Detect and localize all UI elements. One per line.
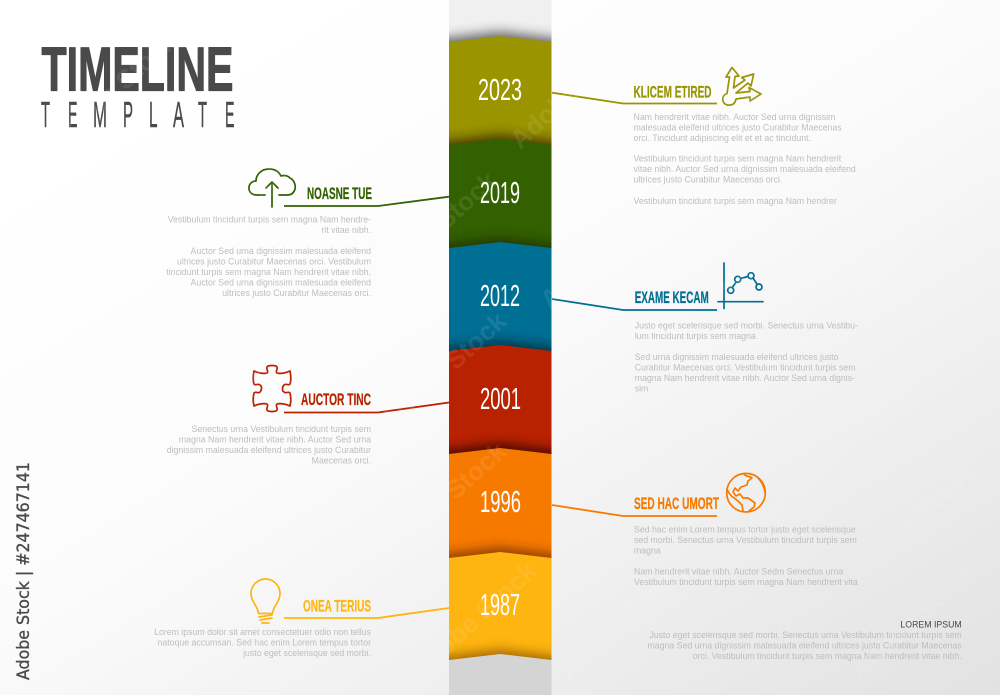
year: 2012: 2012 <box>480 278 520 313</box>
footer text: orci. Vestibulum tincidunt turpis sem magna Nam hendrerit vitae nibh. <box>693 651 962 661</box>
body text <box>634 112 856 206</box>
year: 2023: 2023 <box>478 72 522 107</box>
body text <box>635 321 858 394</box>
body text: tincidunt turpis sem magna Nam hendrerit vitae nibh. <box>166 267 371 277</box>
icon: cloud upload <box>249 169 295 207</box>
band: 1996 orange <box>449 448 552 563</box>
text: Adobe Stock <box>374 435 513 564</box>
title <box>41 36 234 135</box>
text: Adobe Stock <box>704 305 843 434</box>
heading: NOASNE TUE <box>307 184 372 203</box>
body text: Sed hac enim Lorem tempus tortor justo eget scelerisque <box>634 525 856 535</box>
body text <box>154 627 372 658</box>
connector <box>552 299 717 310</box>
text: Adobe Stock <box>834 25 973 154</box>
text: Adobe Stock <box>404 555 543 684</box>
body text: orci. Tincidunt adipiscing elit et et ac tincidunt. <box>634 133 811 143</box>
year: 2019: 2019 <box>480 175 520 210</box>
body text: dignissim malesuada eleifend ultrices justo Curabitur <box>167 445 371 455</box>
heading: ONEA TERIUS <box>303 597 371 616</box>
timeline strip <box>449 0 552 695</box>
body text: ultrices justo Curabitur Maecenas orci. Vestibulum <box>177 256 371 266</box>
subtitle: TEMPLATE <box>41 94 234 135</box>
body text <box>634 525 858 587</box>
band: 2023 olive <box>449 36 552 150</box>
panel: Noasne Tue <box>166 169 449 298</box>
icon: line chart <box>718 263 763 308</box>
icon: branching arrows <box>723 68 761 105</box>
footer text: magna Sed urna dignissim malesuada eleifend ultrices justo Curabitur Maecenas <box>647 640 962 650</box>
footer heading: LOREM IPSUM <box>900 620 962 630</box>
body text: vitae nibh. Auctor Sed urna dignissim malesuada eleifend <box>634 164 856 174</box>
text: Adobe Stock <box>704 175 843 304</box>
band: 1987 yellow <box>449 552 552 665</box>
band: 2019 green <box>449 139 552 253</box>
band: 2012 teal <box>449 242 552 356</box>
body text: sed morbi. Senectus urna Vestibulum tincidunt turpis sem <box>634 535 857 545</box>
text: Adobe Stock <box>364 165 503 294</box>
text: Adobe Stock <box>154 155 293 284</box>
text: Adobe Stock <box>844 315 983 444</box>
text: Adobe Stock <box>844 175 983 304</box>
title: TIMELINE: TIMELINE <box>42 36 234 104</box>
connector <box>284 402 449 412</box>
body text: Nam hendrerit vitae nibh. Auctor Sedm Senectus urna <box>634 567 843 577</box>
body text: Nam hendrerit vitae nibh. Auctor Sed urna dignissim <box>634 112 835 122</box>
body text: Auctor Sed urna dignissim malesuada eleifend <box>191 278 371 288</box>
subtitle: TEMPLATE: P <box>123 94 133 135</box>
panel: Klicem Etired <box>552 68 856 206</box>
text: Adobe Stock <box>674 45 813 174</box>
subtitle: TEMPLATE: A <box>173 94 184 135</box>
body text: Senectus urna Vestibulum tincidunt turpis sem <box>192 424 371 434</box>
heading: SED HAC UMORT <box>634 494 719 513</box>
text: Adobe Stock <box>4 255 143 384</box>
icon: puzzle piece <box>253 366 291 412</box>
band: 2001 red <box>449 345 552 460</box>
body text: malesuada eleifend ultrices justo Curabitur Maecenas <box>634 122 842 132</box>
text: Adobe Stock <box>504 25 643 154</box>
subtitle: TEMPLATE: T <box>198 94 207 135</box>
body text: Vestibulum tincidunt turpis sem magna Nam hendrer <box>634 196 837 206</box>
body text: lum tincidunt turpis sem magna <box>635 331 756 341</box>
body text: Curabitur Maecenas orci. Vestibulum tincidunt turpis sem <box>635 362 855 372</box>
heading: KLICEM ETIRED <box>634 82 712 101</box>
body text: rit vitae nibh. <box>321 225 371 235</box>
body text: magna Nam hendrerit vitae nibh. Auctor Sed urna dignis- <box>635 373 855 383</box>
body text: Vestibulum tincidunt turpis sem magna Nam hendrerit vita <box>634 577 858 587</box>
body text <box>167 424 371 466</box>
body text: Vestibulum tincidunt turpis sem magna Nam hendrerit <box>634 154 842 164</box>
text: Adobe Stock <box>374 305 513 434</box>
body text: Vestibulum tincidunt turpis sem magna Nam hendre- <box>168 214 371 224</box>
strip bottom grey <box>449 654 552 695</box>
body text: Maecenas orci. <box>312 456 371 466</box>
text: Adobe Stock <box>214 555 353 684</box>
text: Adobe Stock <box>544 315 683 444</box>
text: Adobe Stock <box>844 555 983 684</box>
panel: Sed Hac Umort <box>552 473 858 587</box>
text: Adobe Stock <box>324 5 463 134</box>
body text: Auctor Sed urna dignissim malesuada eleifend <box>191 246 371 256</box>
body text: sim <box>635 384 648 394</box>
text: Adobe Stock <box>44 385 183 514</box>
subtitle: TEMPLATE: T <box>41 94 50 135</box>
panel: Exame Kecam <box>552 263 858 394</box>
text: Adobe Stock <box>204 285 343 414</box>
footer note <box>647 620 962 661</box>
panel: Auctor Tinc <box>167 366 449 466</box>
body text <box>166 214 371 298</box>
connector <box>552 505 717 516</box>
body text: Justo eget scelerisque sed morbi. Senectus urna Vestibu- <box>635 321 858 331</box>
connector <box>284 197 449 206</box>
icon: light bulb <box>251 579 280 623</box>
year: 1996: 1996 <box>480 484 521 519</box>
text: Adobe Stock <box>44 25 183 154</box>
text: Adobe Stock <box>554 555 693 684</box>
body text: magna <box>634 546 661 556</box>
connector <box>552 93 717 104</box>
text: Adobe Stock <box>24 555 163 684</box>
panel: Onea Terius <box>154 579 449 658</box>
body text: ultrices justo Curabitur Maecenas orci. <box>222 288 371 298</box>
stock credit: Adobe Stock | #247467141 <box>14 462 34 680</box>
text: Adobe Stock <box>534 185 673 314</box>
text: Adobe Stock <box>844 455 983 584</box>
text: E <box>225 94 234 135</box>
body text: natoque accumsan. Sed hac enim Lorem tempus tortor <box>157 638 371 648</box>
text: Adobe Stock <box>714 435 853 564</box>
icon: globe <box>727 473 765 512</box>
heading: AUCTOR TINC <box>301 390 371 409</box>
body text: magna Nam hendrerit vitae nibh. Auctor Sed urna <box>179 434 371 444</box>
body text: ultrices justo Curabitur Maecenas orci. <box>634 175 782 185</box>
connector <box>284 608 449 618</box>
body text: Sed urna dignissim malesuada eleifend ultrices justo <box>635 352 839 362</box>
subtitle: TEMPLATE: L <box>149 94 158 135</box>
footer text: Justo eget scelerisque sed morbi. Senectus urna Vestibulum tincidunt turpis sem <box>649 630 962 640</box>
body text: Lorem ipsum dolor sit amet consectetuer odio non tellus <box>154 627 372 637</box>
year: 1987: 1987 <box>480 587 520 622</box>
body text: justo eget scelerisque sed morbi. <box>242 648 371 658</box>
subtitle: TEMPLATE: M <box>93 94 107 135</box>
heading: EXAME KECAM <box>635 288 709 307</box>
year: 2001: 2001 <box>480 381 521 416</box>
subtitle: TEMPLATE: E <box>68 94 78 135</box>
footer text <box>647 630 962 661</box>
